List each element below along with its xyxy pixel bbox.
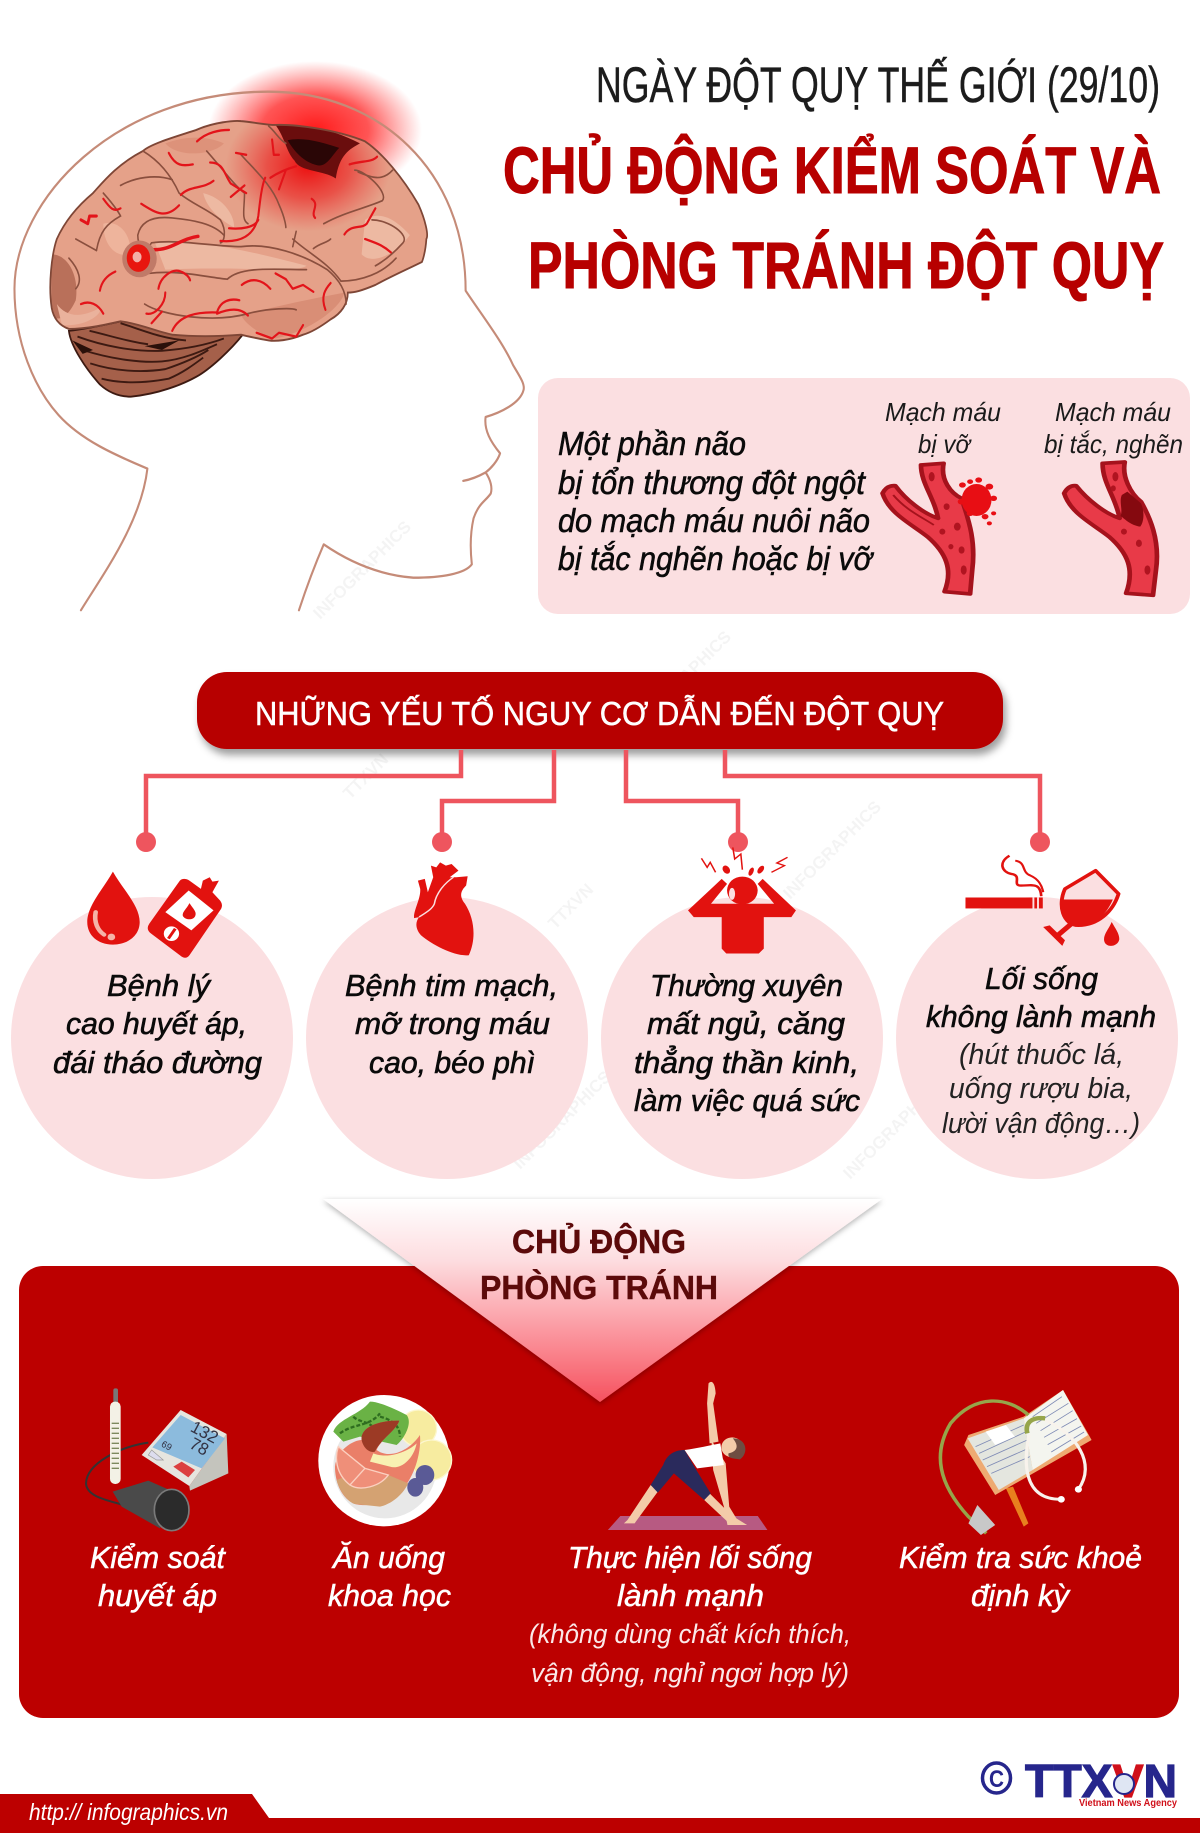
heading: risk factors: [197, 672, 1003, 749]
risk 3 text: Thường xuyên: [650, 968, 843, 1003]
brain outline: [50, 121, 427, 341]
icon: blood pressure monitor: 78: [186, 1433, 212, 1460]
panel: stroke definition: [538, 378, 1190, 614]
risk 3 text: mất ngủ, căng: [647, 1006, 845, 1041]
icon: stethoscope and medical book: [940, 1390, 1092, 1535]
vessel captions: bị vỡ: [918, 429, 972, 459]
icon: food plate: [318, 1395, 452, 1526]
caption: Kiểm soát: [90, 1540, 226, 1575]
rupture burst: [958, 477, 997, 525]
risk 1 text: Bệnh lý: [107, 968, 212, 1003]
risk 4 text: không lành mạnh: [926, 999, 1156, 1034]
caption: [328, 1540, 451, 1613]
details: (không dùng chất kích thích,: [529, 1619, 851, 1649]
caption: định kỳ: [971, 1578, 1071, 1613]
definition text: bị tổn thương đột ngột: [558, 464, 867, 501]
caption: Thực hiện lối sống: [568, 1540, 812, 1575]
clot: [1121, 492, 1143, 527]
logo: TTXVN: Vietnam News Agency: [1079, 1798, 1177, 1809]
risk 2 text: Bệnh tim mạch,: [345, 968, 558, 1003]
risk 3: stress and overwork: [601, 847, 883, 1179]
caption: [568, 1540, 812, 1613]
watermarks: INFOGRAPHICS: [779, 797, 885, 903]
risk 4 details: [942, 1039, 1140, 1140]
connector: risk 2: [432, 750, 554, 852]
prevention 4: regular check-ups: [899, 1390, 1142, 1613]
watermarks: TTXVN: [544, 880, 597, 933]
connector: risk 1: [136, 750, 461, 852]
title: main heading: [503, 133, 1164, 302]
risk 4 text: [926, 961, 1156, 1034]
arrow: prevention heading: [323, 1199, 882, 1402]
risk 1 text: cao huyết áp,: [66, 1006, 247, 1041]
vessel captions: Mạch máu: [885, 397, 1001, 427]
risk 4: unhealthy lifestyle: [896, 856, 1178, 1179]
definition text: bị tắc nghẽn hoặc bị vỡ: [558, 540, 875, 577]
vessel captions: bị tắc, nghẽn: [1044, 429, 1183, 459]
watermarks: [309, 517, 945, 1183]
risk 1 text: đái tháo đường: [53, 1045, 262, 1080]
watermarks: TTXVN: [339, 750, 392, 803]
icon: blood pressure monitor: [86, 1388, 228, 1531]
risk 4 details: lười vận động…): [942, 1108, 1140, 1140]
watermarks: INFOGRAPHICS: [629, 627, 735, 733]
vessel captions: Mạch máu: [1055, 397, 1171, 427]
icon: blocked vessel: [1064, 462, 1157, 595]
risk 2 text: cao, béo phì: [369, 1045, 535, 1080]
icon: blood drop and glucose meter: [87, 872, 222, 958]
cerebrum: [50, 101, 427, 341]
prevention 2: healthy diet: [318, 1395, 452, 1613]
illustration: head with brain: [14, 61, 524, 610]
details: [529, 1619, 851, 1688]
risk 3 text: [634, 968, 860, 1118]
panel: prevention: [19, 1266, 1179, 1718]
connector: risk 3: [626, 750, 748, 852]
vessel captions: [885, 397, 1183, 459]
prevention 3: healthy lifestyle: [529, 1382, 851, 1688]
arrow: prevention heading: CHỦ ĐỘNG: [512, 1222, 686, 1260]
gyri: [69, 126, 404, 318]
aneurysm: [122, 241, 157, 277]
risk 4 details: uống rượu bia,: [949, 1073, 1133, 1105]
icon: ruptured vessel: [883, 463, 997, 594]
risk 3 text: làm việc quá sức: [634, 1083, 860, 1118]
watermarks: INFOGRAPHICS: [309, 517, 415, 623]
caption: huyết áp: [98, 1578, 217, 1613]
footer: red band with url tab: http:// infographics.vn: [29, 1799, 228, 1825]
risk 3 text: thẳng thần kinh,: [634, 1044, 859, 1080]
icon: stressed person: [688, 847, 796, 954]
infarct dark area: [276, 124, 360, 179]
logo: TTXVN: C: [989, 1766, 1004, 1793]
risk 2 text: [345, 968, 558, 1080]
caption: [899, 1540, 1142, 1613]
connector: risk 4: [725, 750, 1050, 852]
risk 1 text: [53, 968, 262, 1080]
caption: Kiểm tra sức khoẻ: [899, 1540, 1142, 1575]
head outline: [14, 92, 524, 610]
icon: cigarette and wine glass: [965, 856, 1119, 946]
icon: yoga pose: [608, 1382, 767, 1530]
red glow over the stroke area: [208, 61, 422, 199]
arrow: prevention heading: PHÒNG TRÁNH: [480, 1269, 718, 1306]
caption: Ăn uống: [331, 1540, 445, 1575]
risk 2 text: mỡ trong máu: [355, 1006, 550, 1041]
cerebellum: [69, 321, 243, 397]
icon: blood pressure monitor: 132: [187, 1417, 222, 1447]
definition text: Một phần não: [558, 425, 746, 462]
prevention 1: control blood pressure: [86, 1388, 228, 1613]
risk 2: cardiovascular: [306, 862, 588, 1179]
risk 4 text: Lối sống: [985, 961, 1098, 996]
risk 4 details: (hút thuốc lá,: [959, 1039, 1124, 1071]
footer: red band with url tab: [0, 1794, 1200, 1833]
icon: heart: [414, 862, 474, 955]
logo: TTXVN: TTXVN: [1025, 1755, 1177, 1807]
heading: risk factors: NHỮNG YẾU TỐ NGUY CƠ DẪN ĐẾN ĐỘT QUỴ: [255, 694, 944, 732]
definition text: [558, 425, 875, 577]
icon: blood pressure monitor: 69: [160, 1439, 174, 1453]
caption: lành mạnh: [617, 1578, 764, 1613]
watermarks: INFOGRAPHICS: [509, 1067, 615, 1173]
caption: khoa học: [328, 1578, 451, 1613]
caption: [90, 1540, 226, 1613]
details: vận động, nghỉ ngơi hợp lý): [531, 1658, 849, 1688]
watermarks: INFOGRAPHICS: [839, 1077, 945, 1183]
definition text: do mạch máu nuôi não: [558, 502, 870, 539]
arteries: [81, 130, 391, 339]
risk 1: hypertension and diabetes: [11, 872, 293, 1179]
